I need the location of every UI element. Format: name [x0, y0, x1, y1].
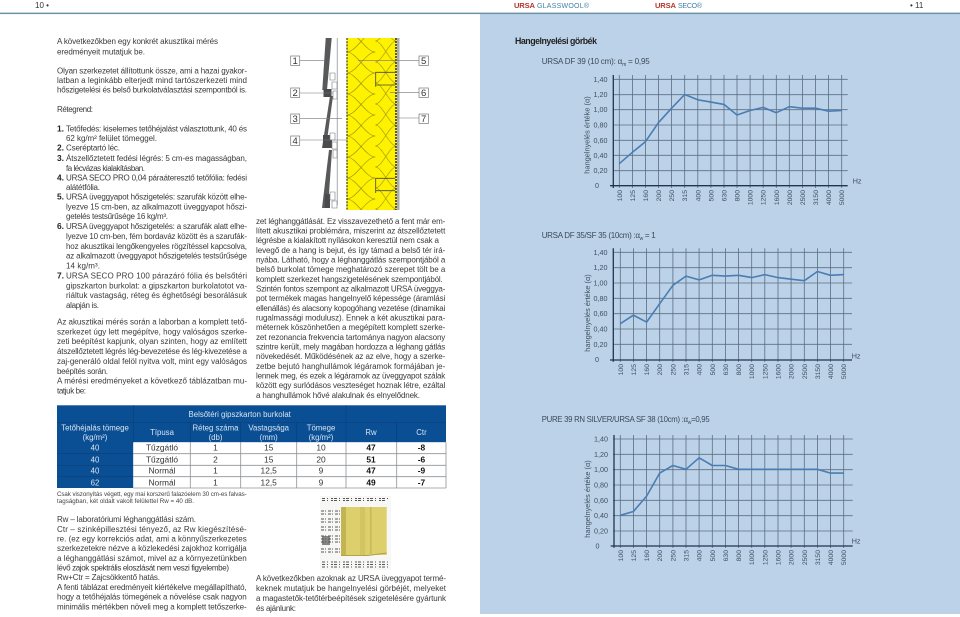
leader lines [300, 60, 419, 140]
text block: acoustic explanation [256, 217, 446, 400]
chart title: =0,95 [691, 415, 710, 424]
text block: Rw and Ctr explanation: minimális mértékben növeli meg a komplett tetőszerke- [57, 602, 247, 612]
chart 3: PURE 39 RN SILVER/URSA SF 38: 2000 [789, 550, 796, 565]
text block: introduction and layer list: fa lécvázas kialakításban. [66, 164, 145, 173]
number labels [291, 56, 428, 147]
table: measurement results: Tetőhéjalás tömege [61, 424, 129, 432]
page header: SECO® [678, 2, 703, 10]
chart 1: URSA DF 39: 400 [695, 190, 702, 201]
text block: introduction and layer list: 62 kg/m² felület tömeggel. [66, 134, 157, 143]
text block: introduction and layer list: az alkalmazott üveggyapot hőszigetelés testsűrűsége [66, 252, 248, 261]
text block: acoustic explanation: levegő de a hang is bejut, és így támad a belső tér irá- [256, 246, 446, 255]
chart 3: PURE 39 RN SILVER/URSA SF 38: 500 [710, 550, 717, 561]
text block: introduction and layer list: riáltuk vastagság, réteg és éghetőségi besorálásuk [66, 291, 248, 300]
chart 1: URSA DF 39: 2500 [800, 190, 807, 205]
chart 2: URSA DF 35/SF 35: 200 [657, 364, 664, 375]
chart title: = 1 [643, 231, 656, 240]
table: measurement results: Rw [365, 428, 377, 437]
text block: Rw and Ctr explanation: lévő zajok spektrális eloszlását nem veszi figyelembe) [57, 564, 229, 572]
table: measurement results: Típusa [150, 428, 175, 437]
chart 1: URSA DF 39: hangelnyelés értéke (α) [582, 96, 592, 174]
text block: Rw and Ctr explanation: Rw – laboratóriumi léghanggátlási szám. [57, 515, 196, 524]
chart 3: PURE 39 RN SILVER/URSA SF 38: 4000 [828, 550, 835, 565]
chart 2: URSA DF 35/SF 35: 1250 [762, 364, 769, 379]
text block: introduction and layer list: latban a leginkább elterjedt mind tartószerkezeti mind [57, 76, 247, 85]
text block: measurement description: Az akusztikai mérés során a laborban a komplett tető- [57, 318, 247, 326]
text block: Rw and Ctr explanation [57, 515, 247, 612]
table: measurement results: 9 [319, 466, 324, 476]
heading: absorption curves: Hangelnyelési görbék [515, 36, 597, 46]
absorption curve [620, 458, 844, 515]
number labels: 1 [293, 56, 298, 67]
text block: curves introduction: keknek mutatjuk be hangelnyelési görbéjét, melyeket [256, 584, 447, 593]
chart title: URSA DF 35/SF 35 (10cm) :α [542, 231, 640, 240]
chart 3: PURE 39 RN SILVER/URSA SF 38: 1,00 [594, 465, 608, 474]
text block: introduction and layer list: hőszigetelési és belső burkolatválasztási szempontból is. [57, 86, 247, 95]
chart 3: PURE 39 RN SILVER/URSA SF 38: 200 [657, 550, 664, 561]
text block: curves introduction [256, 574, 447, 613]
absorption curve [620, 272, 844, 324]
chart 2: URSA DF 35/SF 35: 1,40 [594, 248, 608, 257]
text block: Rw and Ctr explanation: Rw+Ctr = Zajcsökkentő hatás. [57, 573, 160, 582]
absorption curve [619, 94, 842, 164]
text block: acoustic explanation: légrésbe a kialakított nyílásokon keresztül nem csak a [256, 236, 440, 245]
text block: introduction and layer list: 2. [57, 142, 64, 152]
text block: acoustic explanation: pot termékek magas hangelnyelő képessége (áramlási [256, 294, 446, 303]
chart 3: PURE 39 RN SILVER/URSA SF 38: hangelnyelés értéke (α) [583, 460, 592, 538]
chart title: URSA DF 39 (10 cm): α [542, 57, 622, 66]
table: measurement results: Tűzgátló [146, 454, 178, 464]
table: measurement results: 1 [213, 478, 218, 488]
chart 3: PURE 39 RN SILVER/URSA SF 38: 100 [618, 550, 625, 561]
chart 2: URSA DF 35/SF 35: 315 [684, 364, 690, 375]
chart 1: URSA DF 39: 0 [595, 181, 599, 190]
table: measurement results: (kg/m²) [83, 433, 108, 442]
chart 1: URSA DF 39: 0,40 [594, 151, 608, 160]
chart 2: URSA DF 35/SF 35: 400 [697, 364, 704, 375]
text block: acoustic explanation: zetbe bejutó hanghullámok légáramok formájában je- [256, 362, 446, 371]
chart 2: URSA DF 35/SF 35: 125 [631, 364, 638, 375]
text block: acoustic explanation: ellenállás) és alacsony kopogóhang vezetése (dinamikai [256, 304, 446, 313]
table: measurement results: Belsőtéri gipszkarton burkolat [189, 410, 292, 419]
text block: curves introduction: a magastetők-tetőtérbeépítések szigetelésére gyártunk [256, 594, 447, 603]
table footnote [57, 491, 247, 505]
table: measurement results: 2 [213, 454, 218, 464]
chart 1: URSA DF 39: 1000 [748, 190, 755, 205]
chart 2: URSA DF 35/SF 35: 630 [723, 364, 730, 375]
page header: URSA [514, 1, 536, 10]
table: measurement results: 12,5 [261, 466, 277, 476]
chart 2: URSA DF 35/SF 35: hangelnyelés értéke (α) [583, 274, 592, 352]
text block: introduction and layer list: 4. [57, 172, 64, 182]
chart 1: URSA DF 39: 4000 [826, 190, 833, 205]
chart 2: URSA DF 35/SF 35: 5000 [841, 364, 848, 379]
text block: measurement description [57, 318, 248, 396]
table: measurement results [57, 405, 446, 488]
chart 2: URSA DF 35/SF 35: 250 [670, 364, 677, 375]
chart title: PURE 39 RN SILVER/URSA SF 38 (10cm) :α [542, 415, 688, 424]
table: measurement results: 9 [319, 478, 324, 488]
text block: acoustic explanation: lített akusztikai problémára, miszerint az átszellőztetett [256, 226, 446, 236]
chart 1: URSA DF 39: 1250 [761, 190, 768, 205]
text block: acoustic explanation: növekedését. Működésének az az elve, hogy a szerke- [256, 352, 446, 361]
text block: acoustic explanation: között egy surlódásos veszteséget hoznak létre, ezáltal [256, 381, 446, 390]
chart 3: PURE 39 RN SILVER/URSA SF 38: 1,40 [594, 434, 608, 444]
table: measurement results: (mm) [260, 433, 278, 442]
table footnote: Csak viszonyítás végett, egy mai korszerű falazóelem 30 cm-es falvas- [57, 491, 247, 498]
number labels: 3 [293, 114, 298, 125]
page header [0, 1, 960, 14]
chart 2: URSA DF 35/SF 35: 1000 [749, 364, 756, 379]
text block: introduction and layer list: hoz akusztikai lengőkengyeles rögzítéssel kapcsolva, [66, 242, 247, 251]
text block: curves introduction: A következőkben azoknak az URSA üveggyapot termé- [256, 574, 446, 583]
text block: introduction and layer list: 14 kg/m³. [66, 262, 100, 270]
text block: introduction and layer list: getelés testsűrűsége 16 kg/m³. [66, 212, 168, 221]
chart 2: URSA DF 35/SF 35: 800 [736, 364, 743, 375]
chart 2: URSA DF 35/SF 35: 3150 [815, 364, 822, 379]
text block: introduction and layer list: URSA üveggyapot hőszigetelés: a szarufák alatt elhe- [66, 222, 247, 231]
table: measurement results: 49 [366, 478, 376, 488]
chart 3: PURE 39 RN SILVER/URSA SF 38: 0,60 [594, 496, 608, 505]
chart 2: URSA DF 35/SF 35 [542, 231, 861, 379]
chart 2: URSA DF 35/SF 35: 160 [644, 364, 651, 375]
text block: introduction and layer list: 1. [57, 124, 64, 134]
chart title: m [622, 62, 626, 68]
number labels: 6 [421, 88, 426, 99]
chart 1: URSA DF 39: 1,40 [594, 75, 608, 84]
chart 2: URSA DF 35/SF 35: 1,00 [594, 278, 608, 288]
text block: introduction and layer list: URSA SECO PRO 0,04 páraáteresztő tetőfólia: fedési [66, 174, 247, 182]
text block: introduction and layer list: 7. [57, 270, 64, 280]
text block: Rw and Ctr explanation: A fenti táblázat eredményeit kiértékelve megállapítható, [57, 583, 247, 592]
chart 3: PURE 39 RN SILVER/URSA SF 38: 125 [631, 550, 638, 561]
text block: introduction and layer list: 5. [57, 192, 64, 202]
chart 2: URSA DF 35/SF 35: 1600 [776, 364, 782, 379]
table: measurement results: Tömege [307, 424, 335, 432]
text block: introduction and layer list: Cseréptartó léc. [66, 144, 120, 152]
chart 1: URSA DF 39: 630 [722, 190, 728, 201]
text block: acoustic explanation: lennek meg, és ezek a légáramok az üveggyapot szálak [256, 372, 446, 380]
table: measurement results: -9 [418, 466, 426, 476]
chart 1: URSA DF 39: 125 [630, 190, 637, 201]
chart 3: PURE 39 RN SILVER/URSA SF 38 [542, 415, 861, 565]
text block: introduction and layer list: Rétegrend: [57, 105, 93, 114]
table: measurement results: 40 [91, 455, 100, 464]
text block: measurement description: zaj-generáló oldal felöl nyitva volt, mint egy valóságos [57, 357, 247, 366]
chart 3: PURE 39 RN SILVER/URSA SF 38: 1250 [762, 550, 769, 565]
chart 1: URSA DF 39: 2000 [787, 190, 794, 205]
chart 3: PURE 39 RN SILVER/URSA SF 38: 250 [670, 550, 677, 561]
text block: acoustic explanation: Szintén fontos szempont az alkalmazott URSA üveggya- [256, 284, 446, 294]
text block: introduction and layer list: Olyan szerkezetet állítottunk össze, ami a hazai gyakor- [57, 66, 247, 76]
number labels: 2 [293, 88, 298, 99]
text block: Rw and Ctr explanation: re. (ez egy korrekciós adat, ami a könnyűszerkezetes [57, 534, 247, 544]
chart 3: PURE 39 RN SILVER/URSA SF 38: 400 [697, 550, 704, 561]
table: measurement results: 62 [91, 479, 99, 488]
text block: measurement description: beépítés során. [57, 367, 108, 376]
chart title: w [688, 420, 692, 426]
table: measurement results: 40 [91, 444, 100, 453]
page header: GLASSWOOL® [537, 2, 590, 10]
chart 3: PURE 39 RN SILVER/URSA SF 38: 5000 [841, 550, 848, 565]
table: measurement results: 40 [91, 467, 100, 476]
text block: introduction and layer list: URSA SECO PRO 100 párazáró fólia és belsőtéri [66, 271, 247, 280]
text block: introduction and layer list: alátétfólia. [66, 183, 100, 192]
chart 3: PURE 39 RN SILVER/URSA SF 38: 2500 [802, 550, 809, 565]
chart 3: PURE 39 RN SILVER/URSA SF 38: 630 [723, 550, 730, 561]
table: measurement results: -8 [418, 443, 426, 453]
chart 1: URSA DF 39: 3150 [813, 190, 820, 205]
number labels: 5 [421, 56, 426, 67]
chart 1: URSA DF 39: 0,60 [594, 136, 608, 145]
table: measurement results: Ctr [416, 428, 427, 437]
chart 3: PURE 39 RN SILVER/URSA SF 38: 1,20 [594, 450, 608, 459]
chart 2: URSA DF 35/SF 35: 100 [618, 364, 625, 375]
diagram: roof cross-section [291, 38, 428, 210]
text block: introduction and layer list: A következőkben egy konkrét akusztikai mérés [57, 37, 218, 46]
chart 2: URSA DF 35/SF 35: 0 [595, 355, 599, 364]
image: glass wool sample on sheet music [320, 496, 391, 570]
chart 2: URSA DF 35/SF 35: 0,20 [594, 340, 608, 349]
table: measurement results: Vastagsága [248, 424, 290, 432]
text block: introduction and layer list: alapján is. [66, 301, 99, 310]
text block: measurement description: zeti beépítést kapjunk, olyan szinten, hogy az említett [57, 337, 248, 346]
chart 2: URSA DF 35/SF 35: Hz [852, 351, 861, 360]
chart 1: URSA DF 39: 1,20 [594, 90, 608, 99]
table: measurement results: (kg/m²) [309, 433, 334, 442]
table: measurement results: 20 [316, 454, 326, 464]
chart 2: URSA DF 35/SF 35: 0,40 [594, 324, 608, 334]
chart 3: PURE 39 RN SILVER/URSA SF 38: 1000 [749, 550, 756, 565]
table: measurement results: Normál [148, 466, 176, 476]
table: measurement results: 15 [264, 443, 274, 453]
chart 3: PURE 39 RN SILVER/URSA SF 38: 160 [644, 550, 651, 561]
panel: blue chart background [480, 14, 960, 614]
table: measurement results: 1 [213, 466, 218, 476]
text block: introduction and layer list: gipszkarton burkolat: a gipszkarton burkolatotot va- [66, 281, 247, 290]
text block: acoustic explanation: rugalmassági modulusz). Ennek a két akusztikai para- [256, 314, 446, 322]
text block: Rw and Ctr explanation: szerkezetekre nézve a közlekedési zajokhoz korrigálja [57, 544, 247, 553]
number labels: 7 [421, 114, 426, 125]
text block: introduction and layer list: eredményeit mutatjuk be. [57, 48, 145, 56]
chart 3: PURE 39 RN SILVER/URSA SF 38: 800 [736, 550, 743, 561]
text block: introduction and layer list: lyezve 10 cm-ben, fém bordaváz között és a szarufák- [66, 232, 247, 241]
text block: acoustic explanation: szintre került, mely magában hordozza a léghang gátlás [256, 342, 445, 352]
table: measurement results: Normál [148, 478, 176, 488]
text block: introduction and layer list: 3. [57, 153, 64, 163]
text block: measurement description: tatjuk be: [57, 387, 86, 396]
table: measurement results: 10 [316, 443, 326, 453]
chart 2: URSA DF 35/SF 35: 1,20 [594, 263, 608, 272]
chart 3: PURE 39 RN SILVER/URSA SF 38: Hz [852, 537, 861, 546]
text block: introduction and layer list: Tetőfedés: kiselemes tetőhéjalást választottunk, 40 és [66, 124, 247, 134]
chart 1: URSA DF 39: 200 [656, 190, 663, 201]
table: measurement results: (db) [209, 433, 223, 442]
table footnote: tagságban, két oldalt vakolt felülettel Rw = 40 dB. [57, 498, 194, 505]
table: measurement results: -7 [418, 478, 426, 488]
chart 1: URSA DF 39 [542, 57, 862, 205]
chart 3: PURE 39 RN SILVER/URSA SF 38: 1600 [776, 550, 782, 565]
text block: acoustic explanation: méternek köszönhetően a megépített komplett szerke- [256, 323, 446, 332]
page header: 10 • [35, 1, 49, 10]
table: measurement results: 12,5 [261, 478, 277, 488]
chart 2: URSA DF 35/SF 35: 0,60 [594, 309, 608, 318]
chart 2: URSA DF 35/SF 35: 2500 [802, 364, 809, 379]
text block: acoustic explanation: komplett szerkezet hangszigetelésének szempontjából. [256, 275, 443, 284]
text block: measurement description: átszellőztetett légrés lég-bevezetése és lég-kivezetése a [57, 347, 248, 356]
chart 3: PURE 39 RN SILVER/URSA SF 38: 0,20 [594, 526, 608, 536]
chart 3: PURE 39 RN SILVER/URSA SF 38: 0,40 [594, 511, 608, 520]
chart 1: URSA DF 39: 250 [669, 190, 676, 201]
chart 1: URSA DF 39: 5000 [839, 190, 846, 205]
roof membrane line [336, 38, 338, 205]
chart title: = 0,95 [626, 57, 650, 66]
text block: Rw and Ctr explanation: Ctr – szinképillesztési tényező, az Rw kiegészítésé- [57, 525, 247, 534]
text block: measurement description: szerkezet úgy lett megépítve, hogy valóságos szerke- [57, 327, 247, 336]
chart 1: URSA DF 39: Hz [853, 176, 862, 186]
insulation layer [347, 38, 400, 210]
table: measurement results: 47 [366, 466, 376, 476]
text block: acoustic explanation: belső burkolat tömege meghatározó szerepet tölt be a [256, 265, 446, 274]
chart 3: PURE 39 RN SILVER/URSA SF 38: 0 [596, 542, 600, 550]
chart 3: PURE 39 RN SILVER/URSA SF 38: 0,80 [594, 480, 608, 490]
chart 2: URSA DF 35/SF 35: 500 [710, 364, 717, 375]
text block: acoustic explanation: nyába. Látható, hogy a léghanggátlás szempontjából a [256, 256, 446, 264]
text block: introduction and layer list: 6. [57, 221, 64, 231]
chart title: w [640, 236, 644, 242]
table: measurement results: 47 [366, 443, 376, 453]
chart 1: URSA DF 39: 0,80 [594, 120, 608, 130]
text block: acoustic explanation: zet léghanggátlását. Ez visszavezethető a fent már em- [256, 217, 446, 226]
chart 1: URSA DF 39: 100 [617, 190, 624, 201]
chart 1: URSA DF 39: 315 [682, 190, 689, 201]
chart 1: URSA DF 39: 160 [643, 190, 650, 201]
text block: Rw and Ctr explanation: hogy a tetőhéjalás tömegének a növelése csak nagyon [57, 592, 247, 602]
text block: introduction and layer list: lyezve 15 cm-ben, az alkalmazott üveggyapot hőszi- [66, 202, 247, 211]
text block: curves introduction: és ajánlunk: [256, 604, 296, 613]
page header: URSA [655, 1, 677, 10]
chart 3: PURE 39 RN SILVER/URSA SF 38: 3150 [815, 550, 822, 565]
page header: • 11 [910, 1, 924, 10]
chart 1: URSA DF 39: 0,20 [594, 166, 608, 175]
table: measurement results: 51 [366, 454, 376, 464]
text block: acoustic explanation: zet rezonancia frekvencia tartománya nagyon alacsony [256, 333, 445, 342]
chart 1: URSA DF 39: 1,00 [594, 105, 608, 114]
table: measurement results: 15 [264, 454, 274, 464]
table: measurement results: Tűzgátló [146, 443, 178, 453]
chart 1: URSA DF 39: 500 [708, 190, 715, 201]
chart 2: URSA DF 35/SF 35: 4000 [828, 364, 835, 379]
table: measurement results: -6 [418, 454, 426, 464]
text block: measurement description: A mérési eredményeket a következő táblázatban mu- [57, 377, 247, 386]
chart 3: PURE 39 RN SILVER/URSA SF 38: 315 [684, 550, 690, 561]
chart 2: URSA DF 35/SF 35: 2000 [789, 364, 796, 379]
text block: acoustic explanation: a hanghullámok hővé alakulnak és elnyelődnek. [256, 391, 420, 400]
text block: Rw and Ctr explanation: a léghanggátlási számot, mivel az a környezetünkben [57, 554, 247, 563]
text block: introduction and layer list [57, 37, 248, 310]
text block: introduction and layer list: URSA üveggyapot hőszigetelés: szarufák között elhe- [66, 192, 247, 202]
chart 1: URSA DF 39: 1600 [774, 190, 781, 205]
number labels: 4 [293, 136, 298, 147]
table: measurement results: 1 [213, 443, 218, 453]
table: measurement results: Réteg száma [193, 424, 239, 432]
chart 1: URSA DF 39: 800 [734, 190, 742, 201]
chart 2: URSA DF 35/SF 35: 0,80 [594, 294, 608, 303]
text block: introduction and layer list: Átszellőztetett fedési légrés: 5 cm-es magasságban, [66, 154, 247, 163]
roof tiles and battens [322, 38, 337, 208]
